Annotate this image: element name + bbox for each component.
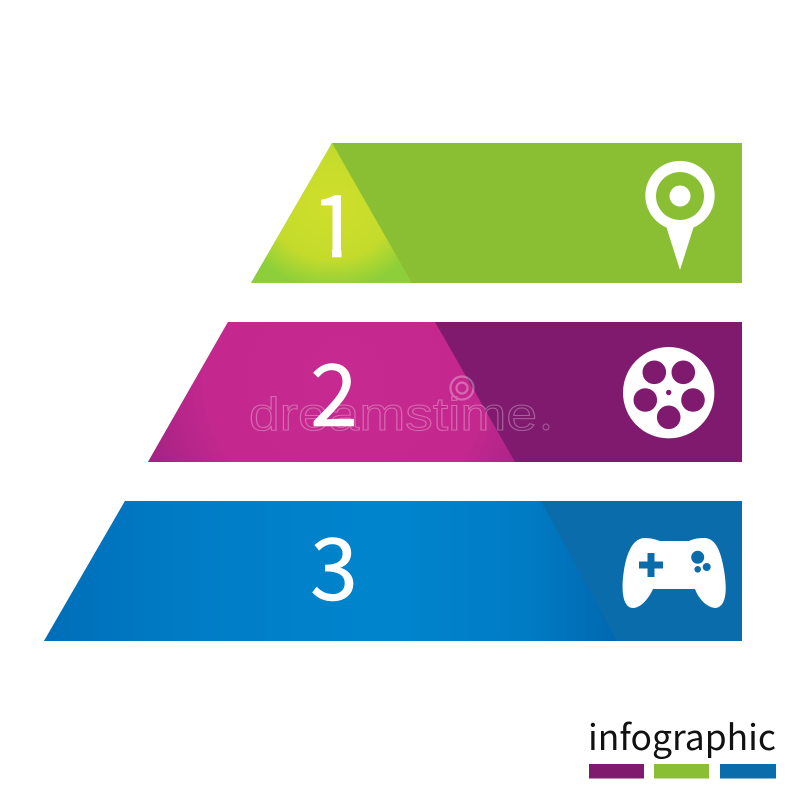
number 1: 1 xyxy=(311,157,359,282)
blue band xyxy=(44,501,742,641)
panel: step 2 magenta xyxy=(148,322,742,462)
icon: map pin xyxy=(645,161,715,270)
watermark xyxy=(249,376,549,440)
icon: film reel xyxy=(623,347,714,438)
panel: step 1 green xyxy=(251,143,742,283)
legend swatch blue xyxy=(720,764,776,778)
number 3: 3 xyxy=(310,500,358,625)
watermark: dreamstime xyxy=(249,388,537,440)
light triangle xyxy=(251,143,412,283)
icon: game controller xyxy=(623,538,726,608)
magenta band xyxy=(148,322,742,462)
legend swatch green xyxy=(654,764,709,778)
legend swatch purple xyxy=(589,764,644,778)
legend xyxy=(588,710,776,778)
green band xyxy=(251,143,742,283)
legend title: infographic xyxy=(588,710,776,761)
panel: step 3 blue xyxy=(44,500,742,641)
light trapezoid xyxy=(44,501,617,641)
light trapezoid xyxy=(148,322,515,462)
number 2: 2 xyxy=(310,326,358,451)
infographic canvas xyxy=(44,143,776,778)
